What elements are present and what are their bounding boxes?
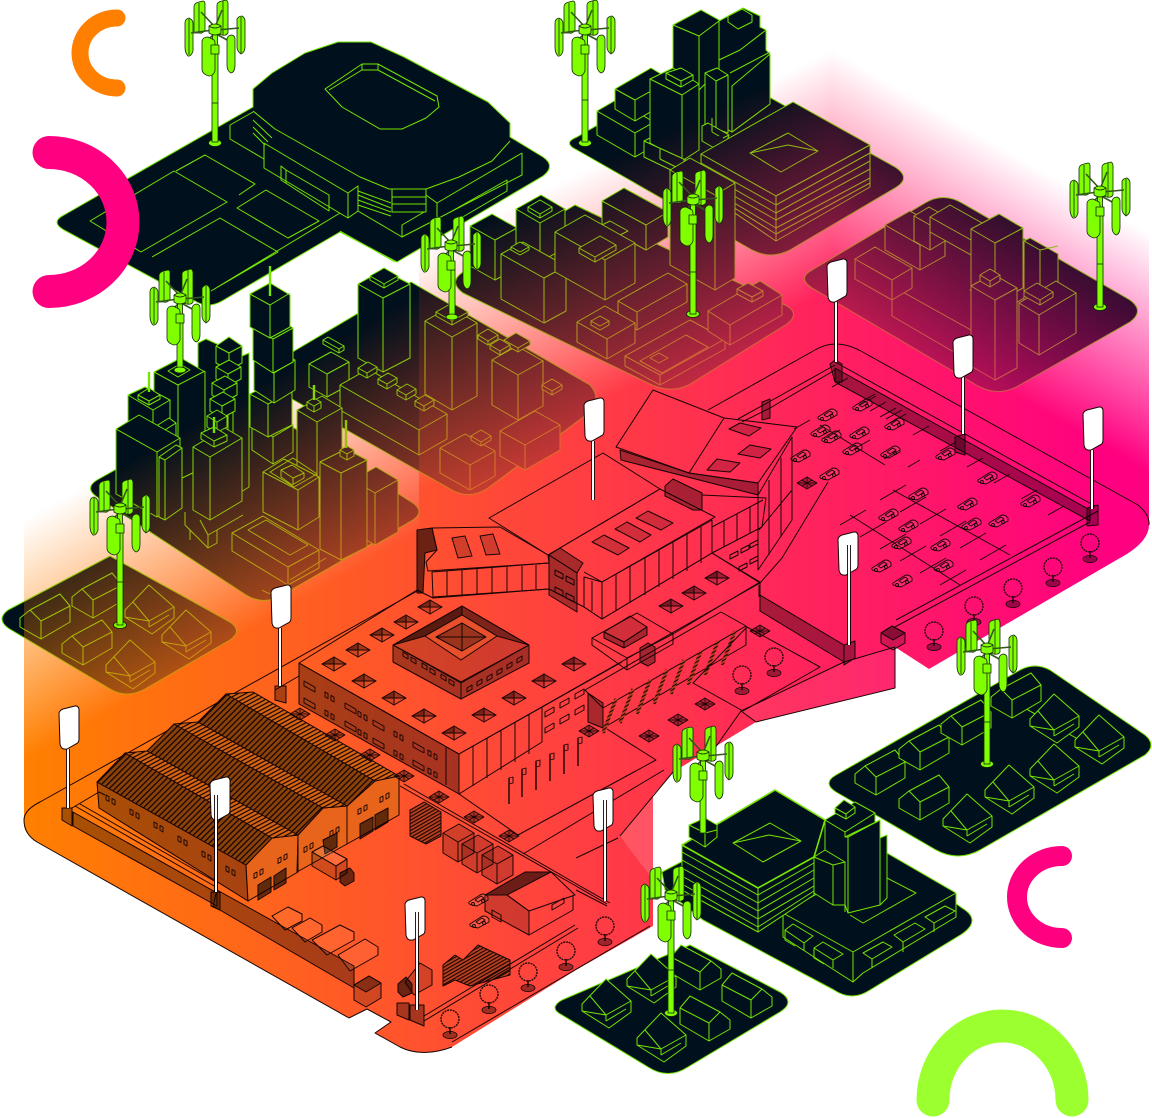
darker plinth facet [741, 647, 895, 722]
rear wing with skylights [417, 527, 549, 597]
trees [441, 534, 1099, 1039]
antenna plinth [689, 818, 717, 847]
service house [485, 872, 575, 935]
front glazing [446, 689, 584, 794]
tower on business district tile [663, 170, 723, 318]
decorative arc: large pink [49, 152, 123, 292]
tower on skyscraper [150, 269, 210, 373]
panel: suburb tile right [829, 666, 1151, 856]
flat upper roof [489, 453, 660, 555]
lamps: white signal panels on poles [59, 259, 1103, 1010]
north-east gate [881, 626, 905, 650]
panel: suburban tile left [2, 556, 236, 694]
office podium [783, 853, 956, 982]
plaza retaining wall [760, 595, 844, 662]
office tower [825, 802, 880, 913]
south boundary lines [400, 770, 664, 1042]
warehouse complex [97, 692, 399, 901]
warehouse walls [97, 782, 248, 901]
plaza diamond [459, 729, 656, 835]
panel: skyscraper tile [90, 266, 419, 600]
office tower rear [880, 835, 887, 905]
decorative arc: lime [933, 1026, 1072, 1100]
flag poles [509, 737, 582, 804]
parked cars [791, 399, 1040, 587]
panel: business district tile [456, 158, 794, 389]
stacked cargo in yard [410, 802, 441, 844]
office slab floors [682, 845, 814, 932]
warehouse front windows [254, 793, 389, 878]
garages [443, 824, 513, 884]
platform outline [24, 344, 1149, 1052]
tower on suburb tile bottom [641, 866, 701, 1016]
office tower wing [814, 850, 845, 912]
panel: office tile [662, 790, 972, 996]
tower on suburb tile right [957, 619, 1017, 768]
delivery truck [312, 846, 354, 886]
gatehouse [354, 976, 381, 1007]
panel: downtown tile top [570, 8, 904, 255]
warehouse doors [258, 808, 388, 900]
warehouse roof near slopes [97, 694, 375, 865]
main block left wall [299, 663, 459, 794]
cargo pallets [443, 945, 510, 986]
tower on right tile [1070, 162, 1130, 310]
panel: right tile with low-rise blocks [804, 198, 1138, 392]
rooftop equipment box [592, 613, 673, 670]
entrance canopy [585, 612, 746, 733]
warehouse roof far slopes [125, 692, 399, 838]
tower on downtown tile [555, 0, 615, 146]
main block roof [299, 553, 760, 754]
panel: stadium tile [57, 42, 550, 305]
parked trailers [272, 907, 378, 971]
office roof [682, 790, 825, 888]
wall post [844, 641, 855, 665]
upper city tiles [2, 8, 1138, 694]
warehouse side windows [106, 795, 235, 876]
tower on stadium tile [185, 0, 245, 146]
panel: suburb tile bottom [555, 945, 788, 1074]
tower on suburb tile left [90, 479, 150, 628]
platform: campus illustration in black line [24, 344, 1149, 1052]
panel: mid-rise tile [262, 268, 596, 495]
tree plaza [693, 482, 828, 765]
angled roof building [616, 390, 797, 582]
central pyramid pavilion [393, 606, 529, 699]
tower cap [835, 800, 855, 819]
upper block [548, 479, 715, 619]
wall posts [62, 686, 424, 1026]
left wall windows [304, 681, 437, 778]
heat overlay fading the city tiles [24, 92, 1138, 694]
small truck [398, 963, 432, 997]
roof edge lines [459, 582, 760, 754]
parking bay lines [794, 378, 1064, 585]
decorative arc: orange [80, 18, 117, 88]
tower on mid-rise tile [421, 216, 481, 320]
perimeter rail lines [72, 676, 299, 887]
pavers [290, 477, 817, 842]
tower on office [673, 726, 733, 833]
lighter plinth facet under platform [620, 797, 653, 880]
perimeter wall front [73, 812, 354, 988]
parking lot walls [738, 360, 1098, 628]
yard cars [469, 894, 489, 928]
decorative arc: small pink [1017, 856, 1062, 938]
roof skylights [322, 571, 729, 740]
